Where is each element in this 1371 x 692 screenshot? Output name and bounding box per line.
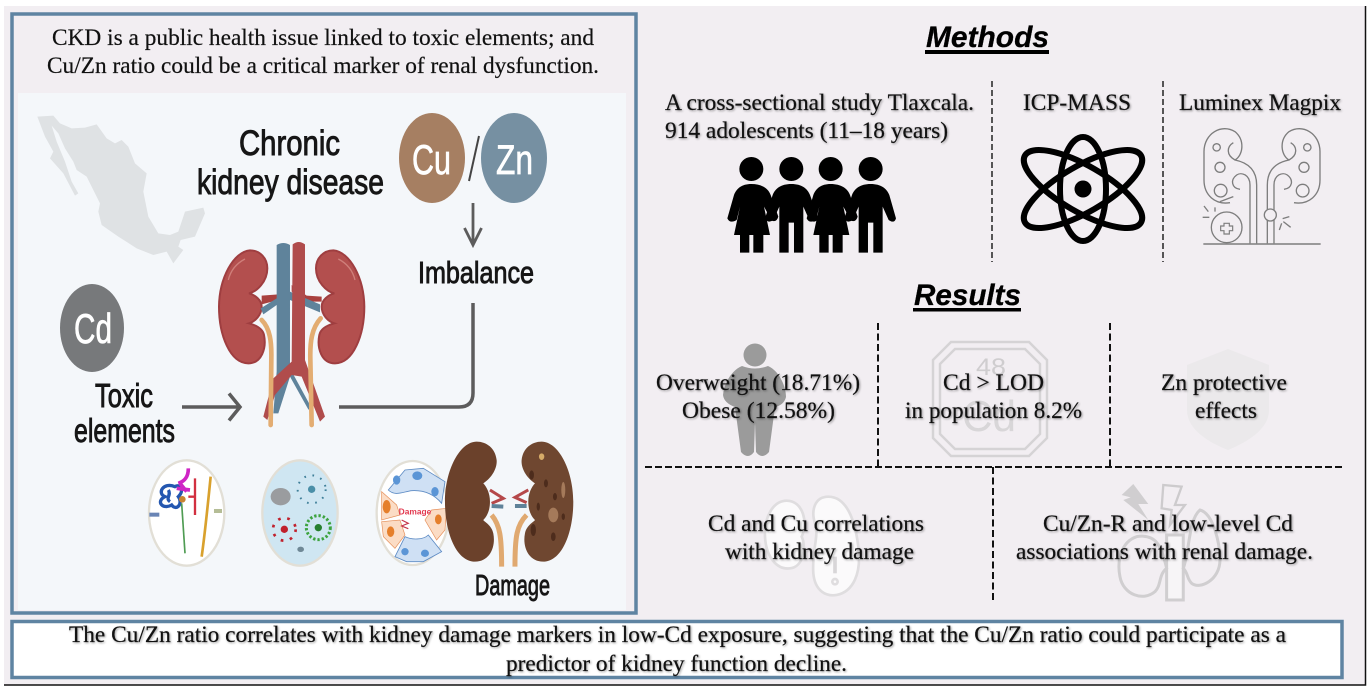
icon: kidneys with lightning bolts xyxy=(1119,484,1220,600)
icon: Cu / Zn ratio: Cu xyxy=(412,136,451,183)
method: cross-sectional study: A cross-sectional study Tlaxcala. xyxy=(665,90,974,116)
icon: kidneys with vessels xyxy=(219,242,364,425)
icon: cadmium periodic tile xyxy=(933,342,1047,456)
result: Cu/Zn-R and low-level Cd: Cu/Zn-R and low-level Cd xyxy=(1043,511,1293,537)
result: Cd and Cu correlations: Cd and Cu correlations xyxy=(708,511,924,537)
arrow: imbalance to kidneys xyxy=(339,303,473,407)
icon: damaged kidneys xyxy=(445,442,573,567)
result: Zn protective effects: Zn protective xyxy=(1161,370,1287,396)
result: overweight and obese: Obese (12.58%) xyxy=(682,398,835,424)
intro statement: CKD is a public health issue linked to toxic elements; and xyxy=(52,25,594,51)
icon: kidney outline xyxy=(1203,129,1321,244)
result: Cu/Zn-R and low-level Cd: associations with renal damage. xyxy=(1016,539,1313,565)
label: damage: Damage xyxy=(475,570,550,602)
arrow: toxic elements to kidneys xyxy=(182,394,240,420)
icon: map of Mexico xyxy=(37,116,205,263)
icon: kidneys with warning xyxy=(765,497,859,595)
method: cross-sectional study: 914 adolescents (11–18 years) xyxy=(665,118,948,144)
result: cadmium above LOD: in population 8.2% xyxy=(905,398,1082,424)
result: Cd and Cu correlations: with kidney damage xyxy=(725,539,914,565)
result: Cu/Zn-R and low-level Cd xyxy=(1016,484,1313,600)
result: Zn protective effects: effects xyxy=(1195,398,1257,424)
icon: tubule damage circle xyxy=(377,461,449,565)
label: toxic elements xyxy=(74,377,175,449)
result: Cd and Cu correlations xyxy=(708,497,924,595)
icon: cadmium periodic tile: 48 xyxy=(976,354,1006,381)
method: ICP-MASS: ICP-MASS xyxy=(1023,90,1131,116)
heading: chronic kidney disease xyxy=(197,124,384,202)
icon: shield xyxy=(1187,349,1269,450)
icon: Cu / Zn ratio: Zn xyxy=(496,136,533,183)
icon: nephron circle xyxy=(149,460,224,566)
dividers xyxy=(878,323,1110,603)
panel: conclusion: The Cu/Zn ratio correlates with kidney damage markers in low-Cd exposure, suggesting that the Cu/Zn ratio could participate as a xyxy=(69,622,1287,648)
icon: atoms circle xyxy=(262,460,338,566)
label: toxic elements: elements xyxy=(74,412,175,449)
label: imbalance: Imbalance xyxy=(418,255,534,290)
icon: four adolescents xyxy=(727,157,896,253)
icon: cadmium element: Cd xyxy=(74,305,112,352)
panel: conclusion xyxy=(12,622,1342,678)
panel: background and kidney disease illustration xyxy=(12,14,636,613)
result: cadmium above LOD xyxy=(905,342,1082,456)
method: cross-sectional study xyxy=(665,90,974,144)
result: overweight and obese: Overweight (18.71%) xyxy=(656,370,860,396)
heading: chronic kidney disease: Chronic xyxy=(239,124,340,163)
dividers xyxy=(992,81,1163,262)
icon: person silhouette xyxy=(723,344,786,456)
icon: cadmium periodic tile: Cd xyxy=(962,392,1016,441)
icon: cadmium element xyxy=(60,284,124,372)
illustration background xyxy=(18,93,626,610)
icon: atom xyxy=(1013,136,1153,242)
heading: chronic kidney disease: kidney disease xyxy=(197,163,384,202)
result: overweight and obese xyxy=(656,344,860,456)
heading: results: Results xyxy=(914,279,1021,312)
panel: conclusion: predictor of kidney function decline. xyxy=(506,651,847,677)
intro statement xyxy=(47,25,599,79)
label: toxic elements: Toxic xyxy=(95,377,153,414)
icon: tubule damage circle: Damage xyxy=(399,507,432,517)
intro statement: Cu/Zn ratio could be a critical marker of renal dysfunction. xyxy=(47,53,599,79)
result: Zn protective effects xyxy=(1161,349,1287,450)
icon: Cu / Zn ratio xyxy=(399,113,547,203)
arrow: ratio to imbalance xyxy=(464,203,482,245)
heading: methods: Methods xyxy=(926,21,1049,54)
method: Luminex Magpix: Luminex Magpix xyxy=(1179,90,1341,116)
result: cadmium above LOD: Cd > LOD xyxy=(943,370,1044,396)
